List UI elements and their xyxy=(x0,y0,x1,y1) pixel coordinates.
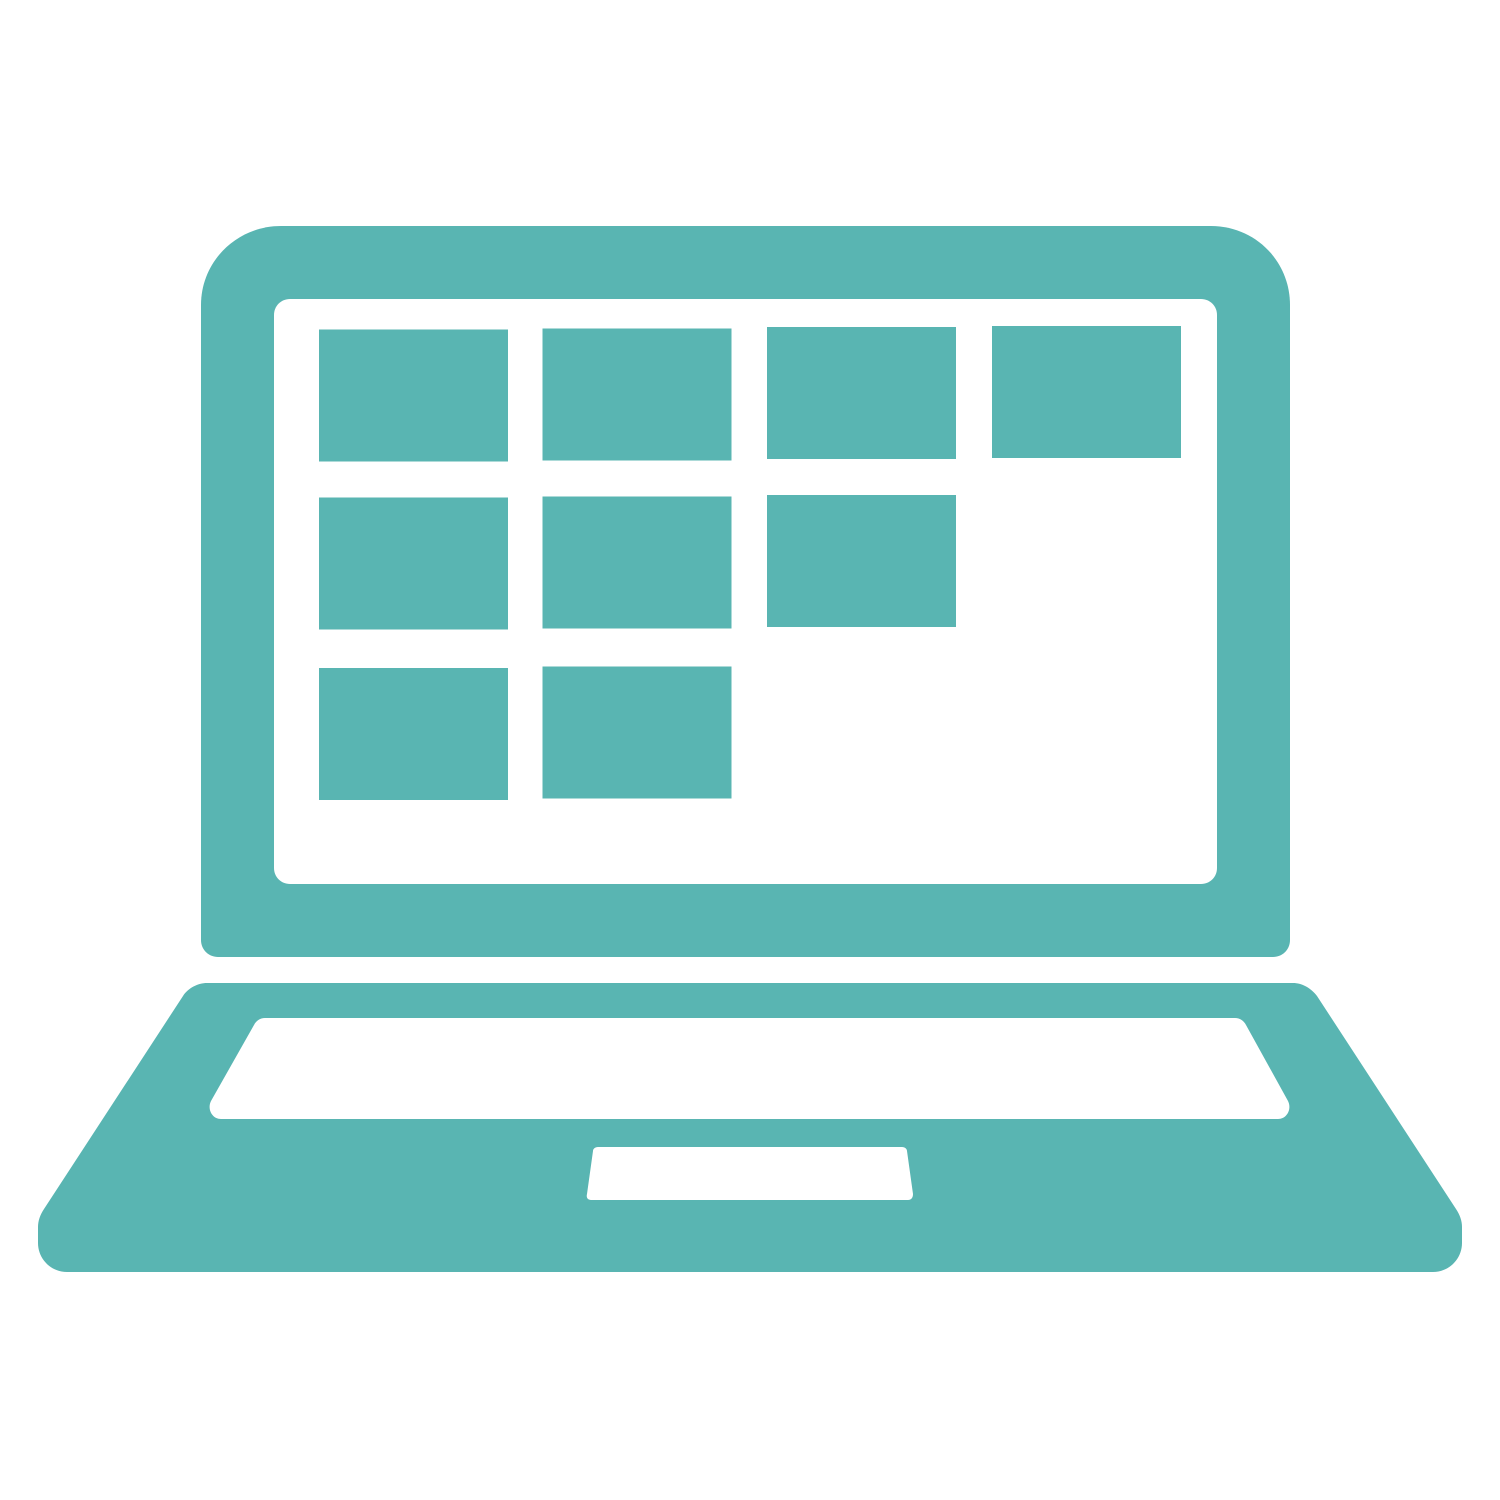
laptop base xyxy=(38,983,1462,1272)
keyboard xyxy=(210,1018,1289,1119)
laptop screen xyxy=(201,226,1290,957)
tile grid xyxy=(319,326,1181,800)
trackpad xyxy=(587,1147,913,1200)
